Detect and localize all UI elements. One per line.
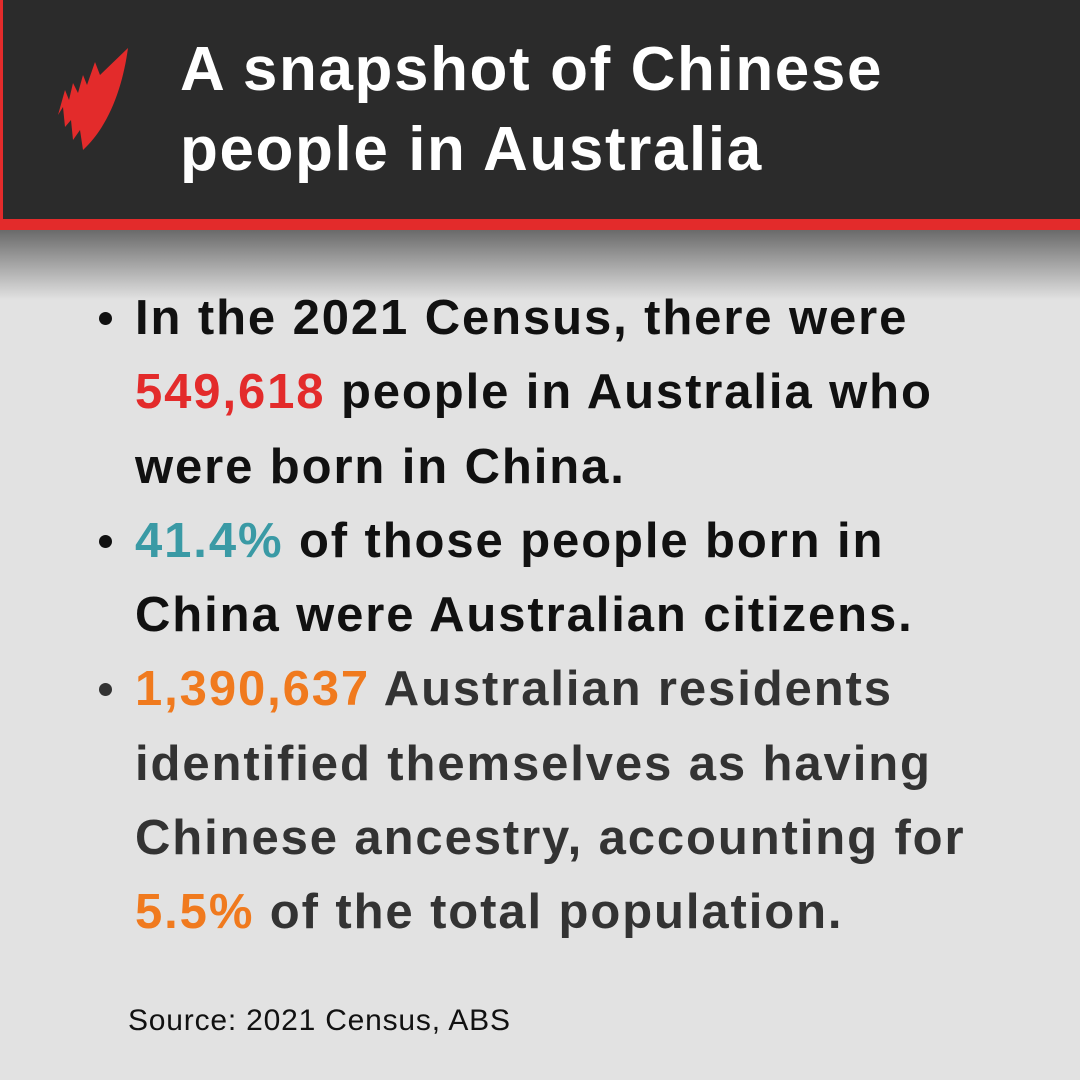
text block: bullets: 5.5% of the total population.	[135, 885, 843, 939]
icon: SBS logo	[58, 48, 128, 150]
text block: bullets: Chinese ancestry, accounting for	[135, 811, 965, 865]
header panel	[0, 0, 1080, 219]
source: Source: 2021 Census, ABS	[128, 1004, 511, 1037]
text block: bullets	[99, 291, 965, 939]
title: A snapshot of Chinese	[180, 35, 883, 104]
title: people in Australia	[180, 115, 763, 184]
text block: bullets: identified themselves as having	[135, 737, 932, 791]
text block: bullets: 549,618 people in Australia who	[135, 365, 933, 419]
text block: bullets: China were Australian citizens.	[135, 588, 914, 642]
text block: bullets: 1,390,637 Australian residents	[135, 662, 893, 716]
text block: bullets: In the 2021 Census, there were	[135, 291, 908, 345]
title	[180, 35, 883, 184]
red rule	[0, 219, 1080, 230]
text block: bullets: were born in China.	[135, 440, 626, 494]
text block: bullets: 41.4% of those people born in	[135, 514, 884, 568]
